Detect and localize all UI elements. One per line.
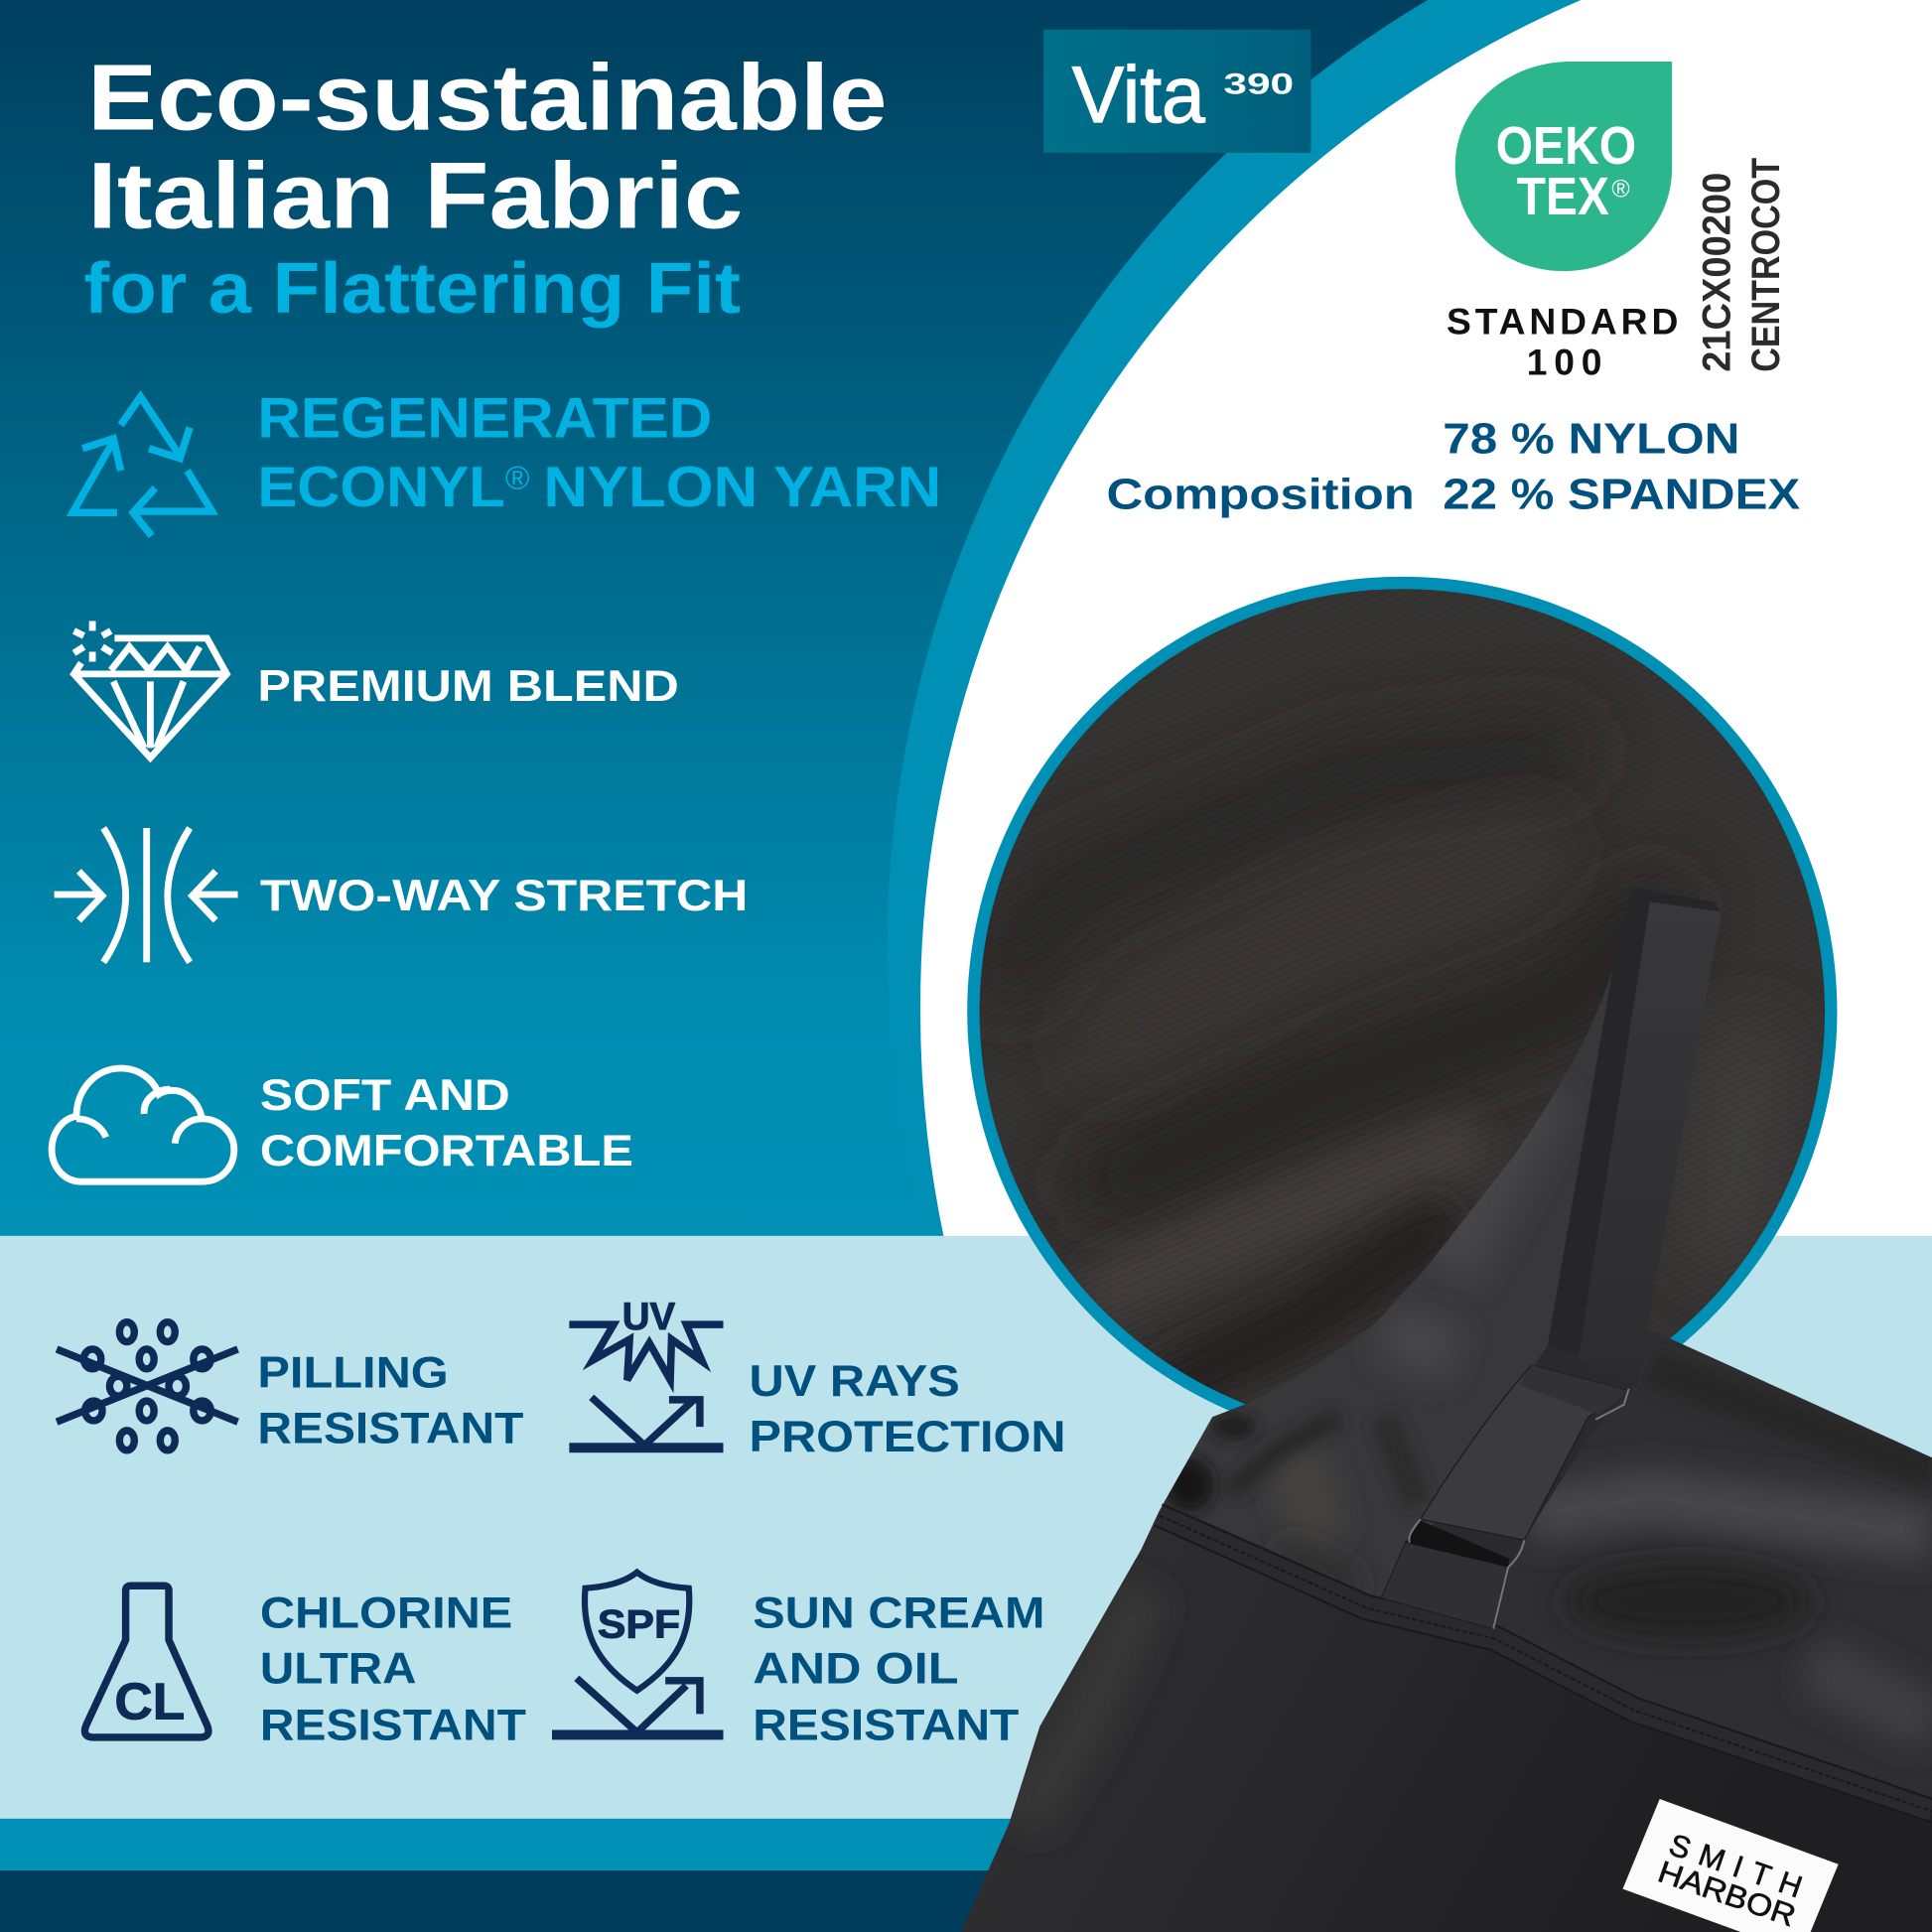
brand label: HARBOR (1654, 1854, 1800, 1932)
title: Italian Fabric (87, 144, 743, 248)
icon: UV protection (569, 1296, 724, 1452)
navy footer stripe (0, 1870, 1932, 1932)
chlorine ultra resistant label: ULTRA (260, 1644, 416, 1693)
ring gap (1406, 1520, 1509, 1568)
sun cream and oil resistant label (753, 1588, 1044, 1749)
strap front (1579, 901, 1722, 1385)
sun cream and oil resistant label: RESISTANT (753, 1701, 1019, 1749)
lower loop tab (1381, 1542, 1508, 1629)
lower body panel (949, 1511, 1932, 1932)
brand label (1622, 1799, 1839, 1932)
premium blend label: PREMIUM BLEND (257, 662, 679, 711)
icon: green leaf (1455, 62, 1672, 271)
tab top fold (1519, 1365, 1629, 1415)
icon: SPF shield (552, 1573, 724, 1739)
icon: UV protection: UV (622, 1296, 675, 1338)
STANDARD text: STANDARD (1447, 300, 1678, 342)
Vita 390 badge: 390 (1223, 68, 1294, 100)
regenerated econyl text (257, 387, 941, 519)
certificate number: 21CX00200 (1695, 173, 1738, 372)
garment body (961, 889, 1932, 1932)
pilling resistant label: PILLING (257, 1348, 449, 1397)
pilling resistant label (257, 1348, 523, 1452)
title: Eco-sustainable (87, 45, 888, 149)
soft and comfortable label (260, 1071, 633, 1175)
icon: SPF shield: SPF (598, 1602, 680, 1646)
composition text (1106, 416, 1800, 519)
icon: recycle (72, 397, 211, 536)
left cup panel (1160, 971, 1612, 1596)
sun cream and oil resistant label: AND OIL (753, 1644, 959, 1693)
fabric close-up circle (967, 577, 1842, 1453)
regenerated econyl text: ECONYL (257, 456, 505, 519)
regenerated econyl text: ® (505, 461, 530, 497)
regenerated econyl text: NYLON YARN (543, 456, 941, 519)
icon: chlorine flask (84, 1586, 208, 1737)
Vita 390 badge (1043, 30, 1311, 153)
composition text: 78 % NYLON (1443, 416, 1739, 464)
icon: diamond (73, 621, 226, 758)
white curved panel (920, 0, 1932, 1237)
icon: chlorine flask: CL (114, 1673, 185, 1730)
title (87, 45, 888, 248)
standard number: 100 (1527, 341, 1601, 382)
teal footer stripe (0, 1819, 1932, 1870)
brand label: SMITH (1665, 1827, 1807, 1904)
TEX text: TEX (1517, 168, 1609, 226)
chlorine ultra resistant label: RESISTANT (260, 1701, 526, 1749)
regenerated econyl text: REGENERATED (257, 387, 712, 451)
swimsuit garment photo (949, 889, 1932, 1932)
icon: two-way stretch arrows (55, 828, 238, 962)
OEKO-TEX logo (1447, 62, 1678, 342)
light blue features panel (0, 1236, 1932, 1819)
icon: pilling (57, 1322, 238, 1450)
chlorine ultra resistant label (260, 1588, 526, 1749)
metal ring (1409, 1389, 1629, 1629)
chlorine ultra resistant label: CHLORINE (260, 1588, 512, 1637)
pilling resistant label: RESISTANT (257, 1404, 523, 1452)
UV rays protection label: PROTECTION (750, 1413, 1066, 1461)
right cup panel (1525, 1338, 1932, 1755)
subtitle: for a Flattering Fit (83, 249, 741, 329)
UV rays protection label: UV RAYS (750, 1357, 960, 1406)
neckline seam (1155, 1504, 1932, 1823)
sun cream and oil resistant label: SUN CREAM (753, 1588, 1044, 1637)
teal curved band (888, 0, 1932, 1237)
two-way stretch label: TWO-WAY STRETCH (260, 872, 748, 920)
background gradient panel (0, 0, 1932, 1237)
icon: cloud (52, 1068, 234, 1181)
soft and comfortable label: SOFT AND (260, 1071, 510, 1120)
OEKO text: OEKO (1496, 117, 1636, 176)
composition text: Composition (1106, 472, 1415, 519)
Vita 390 badge: Vita (1072, 51, 1205, 140)
soft and comfortable label: COMFORTABLE (260, 1127, 633, 1175)
composition text: 22 % SPANDEX (1443, 472, 1800, 519)
strap back layer (1548, 889, 1719, 1355)
certifier name: CENTROCOT (1744, 158, 1788, 372)
UV rays protection label (750, 1357, 1066, 1461)
upper loop tab (1421, 1365, 1629, 1540)
registered mark: ® (1611, 177, 1630, 204)
